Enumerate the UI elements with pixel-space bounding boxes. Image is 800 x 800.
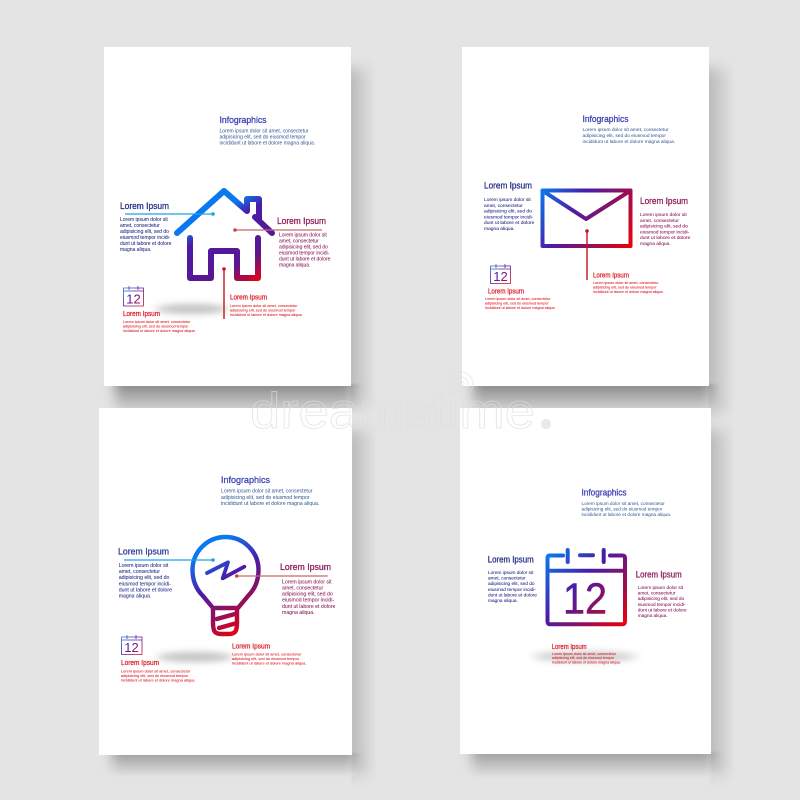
text: envelope intro: Lorem ipsum dolor sit amet, consectetur — [582, 127, 669, 133]
callout: envelope bottom: Lorem Ipsum — [593, 270, 629, 280]
callout: calendar right: Lorem Ipsum — [636, 570, 682, 580]
heading: house infographics: Infographics — [220, 115, 267, 126]
callout: bulb right: adipisicing elit, sed do — [282, 592, 333, 598]
callout: bulb left: magna aliqua. — [119, 594, 151, 600]
callout: calendar left: Lorem ipsum dolor sit — [488, 570, 534, 576]
icon: small calendar — [122, 635, 142, 655]
callout: house left: magna aliqua. — [120, 247, 151, 253]
callout: bulb left — [118, 546, 215, 600]
icon: small calendar: 12 — [493, 269, 508, 284]
callout: bulb left: dunt ut labore et dolore — [119, 587, 172, 593]
callout: house left: Lorem ipsum dolor sit — [120, 217, 168, 223]
heading: bulb infographics: Infographics — [221, 475, 270, 486]
icon: small calendar: 12 — [126, 291, 141, 306]
ground shadow: calendar — [533, 652, 637, 662]
callout: house bottom: Lorem Ipsum — [230, 293, 267, 302]
text: bulb intro: adipisicing elit, sed do eiusmod tempor — [221, 495, 310, 501]
callout: calendar left: dunt ut labore et dolore — [488, 592, 537, 598]
callout: house right — [233, 216, 331, 269]
callout: calendar right: adipisicing elit, sed do — [638, 596, 685, 602]
icon: small calendar: 12 — [124, 640, 139, 655]
callout: house left: adipisicing elit, sed do — [120, 229, 169, 235]
callout: envelope bottom — [585, 229, 664, 294]
callout: bulb left: amet, consectetur — [119, 569, 160, 575]
callout: envelope right: dunt ut labore et dolore — [640, 235, 691, 241]
callout: calendar right — [636, 570, 687, 619]
callout: house right: dunt ut labore et dolore — [279, 257, 331, 263]
callout: calendar bottom: incididunt ut labore et dolore magna aliqua. — [552, 660, 621, 664]
callout: calendar left: eiusmod tempor incidi- — [488, 587, 536, 593]
callout: house right: amet, consectetur — [279, 239, 319, 245]
callout: house bottom: Lorem ipsum dolor sit amet, consectetur — [230, 304, 298, 308]
callout: calendar right: dunt ut labore et dolore — [638, 607, 687, 613]
ground shadow: bulb — [157, 652, 233, 662]
text: house intro: incididunt ut labore et dolore magna aliqua. — [220, 141, 315, 147]
panel: calendar page — [460, 408, 711, 754]
callout: envelope right: magna aliqua. — [640, 241, 671, 247]
text: envelope calendar note: adipisicing elit, sed do eiusmod tempor — [485, 302, 549, 306]
callout: house left: eiusmod tempor incidi- — [120, 235, 171, 241]
callout: house right: eiusmod tempor incidi- — [279, 251, 330, 257]
callout: calendar right: eiusmod tempor incidi- — [638, 602, 686, 608]
callout: bulb bottom — [232, 642, 306, 666]
callout: bulb bottom: incididunt ut labore et dolore magna aliqua. — [232, 660, 306, 666]
callout: envelope bottom: incididunt ut labore et dolore magna aliqua. — [593, 290, 664, 294]
page shadows — [112, 68, 735, 778]
text: house calendar note: Lorem ipsum dolor sit amet, consectetur — [123, 320, 191, 324]
text: envelope intro: incididunt ut labore et dolore magna aliqua. — [582, 139, 675, 145]
callout: bulb right: Lorem Ipsum — [280, 562, 331, 573]
text: bulb calendar note: Lorem ipsum dolor sit amet, consectetur — [121, 668, 191, 673]
icon: calendar: 12 — [563, 574, 607, 623]
callout: envelope left: amet, consectetur — [484, 203, 523, 209]
callout: house right: adipisicing elit, sed do — [279, 245, 328, 251]
callout: envelope right — [640, 196, 691, 247]
callout: house left — [120, 201, 215, 253]
callout: envelope right: adipisicing elit, sed do — [640, 224, 688, 230]
callout: envelope bottom: adipisicing elit, sed do eiusmod tempor — [593, 286, 657, 290]
callout: envelope right: Lorem ipsum dolor sit — [640, 212, 687, 218]
callout: calendar left — [488, 555, 537, 604]
callout: bulb right: Lorem ipsum dolor sit — [282, 579, 332, 585]
callout: envelope left: magna aliqua. — [484, 226, 515, 232]
callout: bulb left: Lorem ipsum dolor sit — [119, 563, 169, 569]
callout: house left: Lorem Ipsum — [120, 201, 169, 212]
callout: bulb bottom: Lorem ipsum dolor sit amet, consectetur — [232, 651, 302, 656]
text: envelope calendar note: Lorem Ipsum — [488, 286, 524, 296]
callout: bulb right — [235, 562, 335, 616]
callout: house left: dunt ut labore et dolore — [120, 241, 172, 247]
ground shadow: house — [156, 304, 228, 314]
text: bulb intro: Lorem ipsum dolor sit amet, consectetur — [221, 489, 313, 495]
callout: bulb bottom: adipisicing elit, sed do eiusmod tempor — [232, 656, 300, 661]
callout: bulb right: eiusmod tempor incidi- — [282, 598, 334, 604]
callout: house right: Lorem Ipsum — [277, 216, 326, 227]
callout: calendar bottom — [552, 642, 621, 664]
callout: bulb right: dunt ut labore et dolore — [282, 604, 335, 610]
callout: envelope left: Lorem ipsum dolor sit — [484, 197, 531, 203]
callout: envelope left: Lorem Ipsum — [484, 180, 532, 192]
text: calendar intro: adipisicing elit, sed do eiusmod tempor — [582, 506, 663, 512]
panel: house page — [104, 47, 351, 386]
icon: house — [177, 191, 272, 278]
text: envelope calendar note: Lorem ipsum dolor sit amet, consectetur — [485, 297, 551, 301]
icon: small calendar — [124, 286, 144, 306]
callout: house bottom: incididunt ut labore et dolore magna aliqua. — [230, 313, 303, 317]
text: house intro: adipisicing elit, sed do eiusmod tempor — [220, 135, 306, 141]
icon: calendar — [548, 550, 625, 624]
callout: calendar bottom: adipisicing elit, sed do eiusmod tempor — [552, 656, 615, 660]
callout: envelope left: dunt ut labore et dolore — [484, 220, 535, 226]
callout: bulb right: amet, consectetur — [282, 586, 324, 592]
heading: envelope infographics: Infographics — [582, 114, 629, 125]
callout: bulb left: adipisicing elit, sed do — [119, 575, 170, 581]
callout: calendar left: amet, consectetur — [488, 576, 526, 582]
heading: calendar infographics: Infographics — [582, 488, 627, 498]
panel: light bulb page — [99, 408, 352, 755]
callout: calendar right: Lorem ipsum dolor sit — [638, 585, 684, 591]
callout: envelope right: amet, consectetur — [640, 218, 679, 224]
callout: house right: magna aliqua. — [279, 263, 310, 269]
text: house intro: Lorem ipsum dolor sit amet, consectetur — [220, 129, 309, 135]
text: calendar intro: Lorem ipsum dolor sit amet, consectetur — [582, 501, 665, 506]
callout: envelope right: eiusmod tempor incidi- — [640, 229, 690, 235]
callout: house bottom — [222, 267, 303, 319]
text: envelope intro: adipisicing elit, sed do eiusmod tempor — [582, 133, 666, 139]
callout: bulb right: magna aliqua. — [282, 610, 315, 616]
text: envelope calendar note — [485, 286, 556, 310]
callout: calendar left: magna aliqua. — [488, 598, 518, 604]
text: house calendar note: incididunt ut labore et dolore magna aliqua. — [123, 329, 196, 333]
callout: envelope left: eiusmod tempor incidi- — [484, 214, 534, 220]
callout: bulb left: Lorem Ipsum — [118, 546, 169, 558]
callout: house right: Lorem ipsum dolor sit — [279, 233, 327, 239]
text: bulb calendar note: Lorem Ipsum — [121, 658, 159, 667]
callout: calendar bottom: Lorem ipsum dolor sit amet, consectetur — [552, 652, 617, 656]
callout: envelope right: Lorem Ipsum — [640, 196, 688, 207]
text: bulb intro: incididunt ut labore et dolore magna aliqua. — [221, 501, 319, 507]
text: bulb calendar note: incididunt ut labore et dolore magna aliqua. — [121, 678, 195, 682]
watermark: dreamstime — [250, 383, 535, 439]
panel: envelope page — [462, 47, 709, 386]
callout: bulb bottom: Lorem Ipsum — [232, 642, 270, 650]
callout: house left: amet, consectetur — [120, 223, 160, 229]
callout: calendar bottom: Lorem Ipsum — [552, 642, 587, 651]
callout: calendar left: Lorem Ipsum — [488, 555, 534, 566]
callout: calendar right: magna aliqua. — [638, 613, 668, 619]
text: bulb calendar note — [121, 658, 195, 682]
icon: envelope — [542, 190, 630, 246]
callout: calendar left: adipisicing elit, sed do — [488, 581, 535, 587]
callout: envelope left — [484, 180, 535, 232]
text: calendar intro: incididunt ut labore et dolore magna aliqua. — [582, 512, 671, 517]
text: envelope calendar note: incididunt ut labore et dolore magna aliqua. — [485, 306, 556, 310]
text: house calendar note: adipisicing elit, sed do eiusmod tempor — [123, 324, 189, 328]
text: house calendar note — [123, 309, 196, 333]
callout: bulb left: eiusmod tempor incidi- — [119, 581, 171, 587]
callout: house bottom: adipisicing elit, sed do eiusmod tempor — [230, 308, 296, 312]
text: house calendar note: Lorem Ipsum — [123, 309, 160, 318]
text: bulb calendar note: adipisicing elit, sed do eiusmod tempor — [121, 673, 189, 678]
callout: envelope left: adipisicing elit, sed do — [484, 209, 532, 215]
icon: small calendar — [490, 264, 510, 284]
callout: envelope bottom: Lorem ipsum dolor sit amet, consectetur — [593, 281, 659, 285]
icon: light bulb — [192, 537, 258, 634]
callout: calendar right: amet, consectetur — [638, 591, 676, 597]
